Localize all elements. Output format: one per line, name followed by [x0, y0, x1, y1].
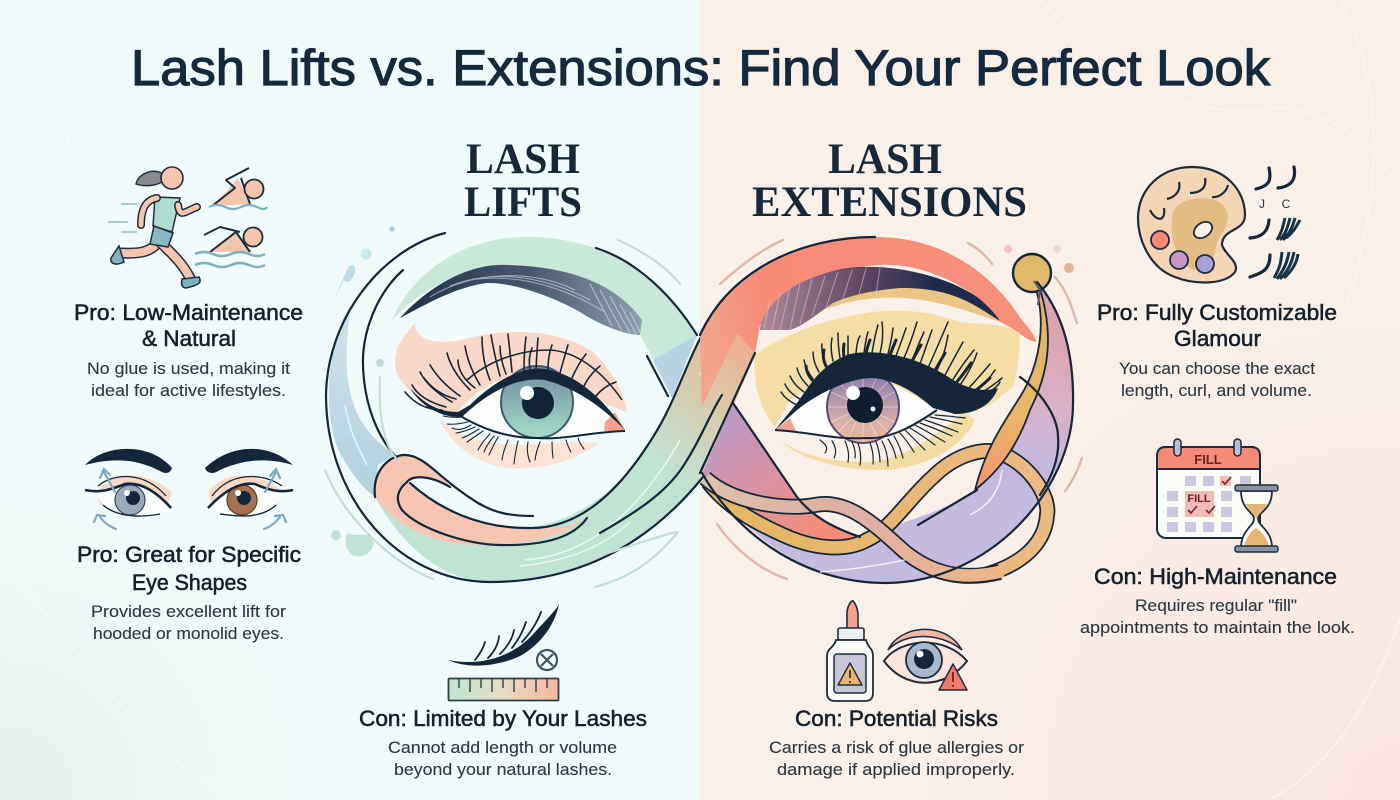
text block: con high-maintenance: Requires regular "fill"	[1135, 596, 1297, 615]
text block: pro customizable: length, curl, and volume.	[1121, 381, 1312, 400]
caruncle	[604, 412, 625, 431]
icon: palette with lash styles: C	[1282, 197, 1291, 211]
icon: calendar and hourglass	[1157, 439, 1278, 552]
palette	[1138, 167, 1245, 282]
crossed circle	[537, 650, 557, 670]
gold accent loop	[708, 451, 1047, 575]
gold ball	[1013, 254, 1051, 292]
eyeshadow tan	[754, 311, 1020, 427]
gold blade	[975, 280, 1048, 490]
ribbon sweeping to centre	[375, 300, 756, 582]
text block: pro eye shapes: Eye Shapes	[132, 570, 247, 595]
mauve twist	[705, 478, 1000, 576]
left eye	[85, 449, 172, 529]
lilac and rose band	[705, 278, 1073, 583]
text block: pro customizable: Glamour	[1174, 326, 1261, 351]
lower lid	[775, 410, 937, 438]
icon: runner and swimmers	[109, 167, 267, 288]
text block: pro eye shapes: Provides excellent lift for	[91, 602, 286, 621]
text block: con risks: Con: Potential Risks	[795, 706, 998, 731]
calendar	[1157, 439, 1260, 538]
text block: pro customizable: You can choose the exact	[1119, 359, 1315, 378]
irritated eye	[884, 629, 967, 690]
lid and crease	[410, 368, 625, 430]
iris	[501, 366, 573, 438]
text block: con high-maintenance: Con: High-Maintenance	[1094, 564, 1337, 589]
eye white	[457, 370, 625, 438]
lash styles	[1250, 167, 1295, 277]
heading: Lash Extensions	[752, 136, 1027, 226]
brow: lash lifts	[400, 265, 642, 335]
runner	[109, 167, 200, 288]
text block: con high-maintenance: appointments to maintain the look.	[1080, 618, 1355, 637]
upper lashes	[405, 334, 616, 410]
peach tail	[375, 455, 587, 545]
outlines	[326, 233, 722, 582]
lower lashes	[820, 415, 965, 466]
swimmer top	[209, 168, 267, 209]
text block: con risks: damage if applied improperly.	[777, 760, 1015, 779]
upper lashes	[781, 322, 1002, 405]
text block: con risks	[769, 706, 1024, 779]
text block: con limited	[359, 706, 647, 779]
hourglass	[1235, 485, 1278, 552]
text block: pro eye shapes: hooded or monolid eyes.	[93, 624, 284, 643]
eyeshadow peach	[395, 323, 627, 418]
lower lashes	[443, 416, 584, 464]
glue bottle	[827, 601, 873, 701]
left background panel	[0, 0, 700, 800]
right background panel	[700, 0, 1400, 800]
under-eye peach	[440, 420, 600, 468]
text block: pro low-maintenance: & Natural	[142, 326, 236, 351]
text block: con limited: beyond your natural lashes.	[394, 760, 612, 779]
text block: con limited: Con: Limited by Your Lashes	[359, 706, 647, 731]
text block: con high-maintenance	[1080, 564, 1355, 637]
upper lash band	[775, 352, 998, 430]
ruler	[448, 678, 558, 700]
text block: pro customizable	[1097, 300, 1337, 400]
text block: pro low-maintenance	[74, 300, 303, 400]
icon: palette with lash styles: J	[1259, 197, 1265, 211]
outlines	[700, 237, 1073, 583]
text block: pro eye shapes: Pro: Great for Specific	[77, 542, 301, 567]
heading: Lash Lifts	[464, 136, 582, 226]
heading: Lash Extensions: LASH	[828, 136, 942, 183]
central infinity illustration: lash extensions loop	[700, 237, 1082, 583]
icon: glue bottle and irritated eye	[827, 601, 967, 701]
lift accents	[325, 240, 680, 587]
purple and salmon band	[702, 403, 857, 540]
iris	[827, 371, 899, 443]
eye white	[775, 378, 935, 438]
central infinity illustration: lash lifts loop	[325, 226, 756, 587]
text block: con risks: Carries a risk of glue allergies or	[769, 738, 1024, 757]
title: Lash Lifts vs. Extensions: Find Your Perfect Look	[131, 40, 1271, 96]
heading: Lash Lifts: LASH	[466, 136, 580, 183]
icon: lash and ruler	[448, 604, 559, 700]
calendar: FILL	[1187, 493, 1211, 505]
right eye	[205, 449, 293, 529]
green crescent	[392, 237, 697, 395]
icon: palette with lash styles	[1138, 167, 1300, 282]
swimmer bottom	[195, 227, 265, 267]
blue crescent	[329, 302, 395, 497]
motion accents	[717, 240, 1082, 579]
icon: eye shapes with lift arrows	[85, 449, 293, 529]
brow: extensions	[760, 267, 1000, 330]
text block: pro customizable: Pro: Fully Customizable	[1097, 300, 1337, 325]
heading: Lash Extensions: EXTENSIONS	[752, 179, 1027, 226]
caruncle	[775, 418, 796, 431]
short lash	[448, 604, 559, 666]
heading: Lash Lifts: LIFTS	[464, 179, 582, 226]
text block: pro low-maintenance: ideal for active lifestyles.	[91, 381, 286, 400]
text block: con limited: Cannot add length or volume	[388, 738, 617, 757]
calendar: FILL	[1194, 452, 1222, 467]
text block: pro low-maintenance: Pro: Low-Maintenance	[74, 300, 303, 325]
salmon crescent	[700, 237, 1036, 407]
text block: pro low-maintenance: No glue is used, making it	[87, 359, 290, 378]
text block: pro eye shapes	[77, 542, 301, 643]
